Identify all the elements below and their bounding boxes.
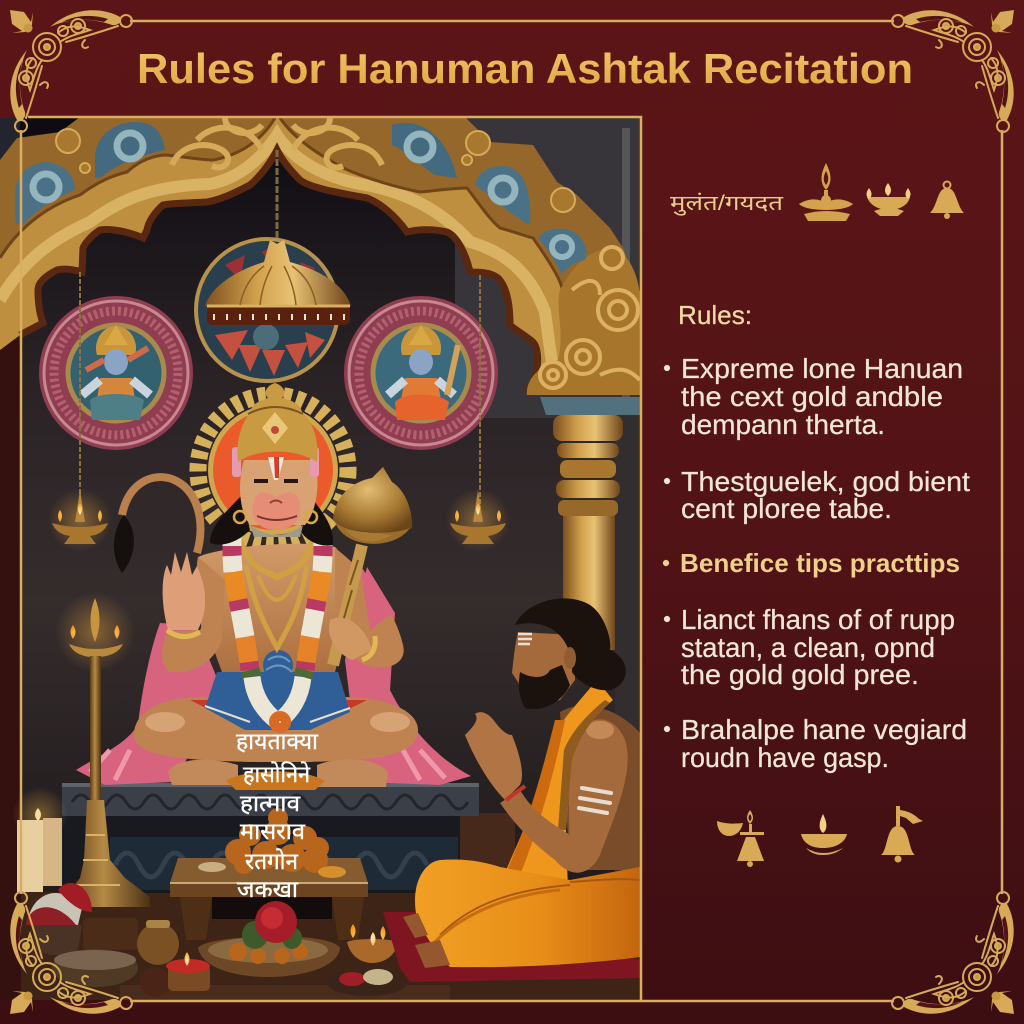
- feet: [403, 913, 450, 968]
- gold necklaces: [240, 540, 313, 648]
- orange offering on platform: [226, 771, 325, 790]
- priest figure: [383, 598, 640, 982]
- right arm: [335, 548, 404, 668]
- deity name overlay text: रतगोन: [245, 848, 299, 874]
- rule four: roudn have gasp.: [681, 742, 889, 773]
- tail: [114, 477, 200, 573]
- rule two: cent ploree tabe.: [681, 493, 892, 524]
- rule two: [664, 466, 970, 524]
- wall medallion: left deity: [39, 296, 193, 450]
- gold crown: [237, 383, 318, 462]
- hair: [210, 495, 333, 546]
- corner ornament: top left: [10, 10, 132, 132]
- sacred arm lines: [579, 788, 611, 813]
- head: [512, 598, 626, 709]
- icon: tall oil lamp: [799, 163, 853, 221]
- mace: [333, 467, 412, 665]
- rule three: the gold gold pree.: [681, 659, 919, 690]
- icon: diya: [801, 814, 847, 855]
- blue spandrel medallions: [15, 122, 587, 275]
- right hand: [329, 618, 375, 660]
- icon: three flame diya: [866, 183, 910, 216]
- rule one: [664, 353, 963, 440]
- rule four: [664, 714, 967, 773]
- face: [232, 447, 319, 537]
- rule three: [664, 604, 955, 690]
- pink drapes: [76, 567, 471, 785]
- brass bowls and pot: [52, 918, 179, 997]
- wall medallion: centre lotus: [196, 239, 338, 381]
- corner ornament: bottom right: [892, 892, 1014, 1014]
- wall medallion: right deity: [344, 296, 498, 450]
- icon: bell with flag: [881, 806, 923, 862]
- image frame lines: [28, 117, 641, 1000]
- flower basket: [26, 883, 92, 955]
- right pillar: [540, 397, 640, 650]
- deity name overlay text: हायताक्या: [236, 728, 319, 754]
- temple wall: [0, 118, 642, 1000]
- red mat: [383, 912, 640, 982]
- hanging lamp left: [48, 272, 112, 552]
- floor: [21, 892, 642, 1000]
- rule three: Lianct fhans of of rupp: [681, 604, 955, 635]
- right scroll bracket: [527, 247, 640, 395]
- small plate: [327, 969, 407, 996]
- rule one: Expreme lone Hanuan: [681, 353, 963, 384]
- icon: bell: [930, 182, 964, 219]
- hanuman figure: [76, 383, 471, 787]
- candles: [12, 787, 68, 892]
- deity name overlay text: [236, 728, 319, 902]
- rules heading: Rules:: [678, 300, 752, 330]
- red candle: [166, 952, 210, 991]
- legs: [134, 697, 418, 787]
- lit diya bowl: [347, 924, 398, 963]
- sweets table: [170, 808, 368, 940]
- ornate golden arch: [0, 117, 640, 395]
- forearm: [500, 790, 600, 873]
- icon: lamp with bell: [717, 810, 764, 867]
- rule four: Brahalpe hane vegiard: [681, 714, 967, 745]
- wooden dado: [440, 813, 515, 893]
- panel: temple illustration: [0, 117, 642, 1000]
- offering plate: [198, 901, 340, 977]
- corner ornament: top right: [892, 10, 1014, 132]
- devanagari caption: मुलंत/गयदत: [670, 192, 784, 216]
- back and arm: [560, 706, 640, 870]
- deity name overlay text: मासराव: [240, 818, 306, 844]
- benefit tips subheading: Benefice tips practtips: [680, 548, 960, 578]
- halo: [198, 395, 348, 545]
- flower garland: [232, 534, 323, 727]
- rule two: Thestguelek, god bient: [681, 466, 970, 497]
- corner ornament: bottom left: [10, 892, 132, 1014]
- rule three: statan, a clean, opnd: [681, 632, 935, 663]
- hanging dome lamp: [205, 150, 351, 325]
- standing oil lamp: [55, 592, 150, 907]
- hanging lamp right: [446, 275, 510, 552]
- rule one: the cext gold andble: [681, 381, 943, 412]
- title: Rules for Hanuman Ashtak Recitation: [137, 45, 913, 92]
- stone platform: [62, 783, 479, 893]
- rule one: dempann therta.: [681, 409, 885, 440]
- raised arm and hand: [162, 552, 225, 672]
- lower robe: [415, 859, 640, 967]
- deity name overlay text: हात्माव: [240, 790, 301, 816]
- deity name overlay text: हासोनिने: [243, 761, 311, 787]
- floor offerings: [26, 883, 407, 997]
- torso: [197, 544, 347, 672]
- praying hands: [465, 712, 525, 800]
- blue dhoti: [190, 650, 367, 730]
- saffron sash: [500, 680, 613, 890]
- deity name overlay text: जकखा: [237, 876, 299, 902]
- rules list: [663, 353, 970, 773]
